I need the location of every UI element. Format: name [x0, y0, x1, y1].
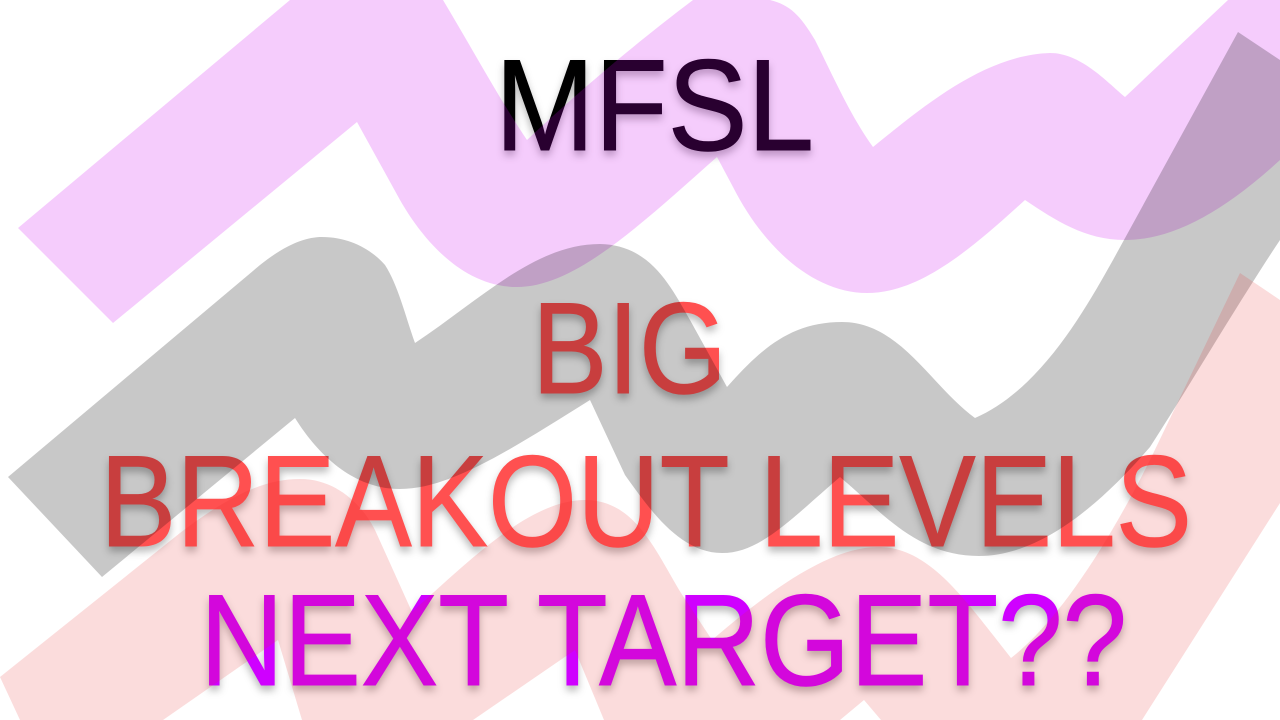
title: MFSL: MFSL	[495, 32, 814, 178]
heading: BIG: BIG	[532, 275, 727, 421]
zigzag band: pink	[0, 273, 1280, 720]
heading: NEXT TARGET: NEXT TARGET??	[200, 567, 1127, 713]
zigzag band: gray	[8, 32, 1280, 577]
zigzag band: purple	[18, 0, 1280, 323]
